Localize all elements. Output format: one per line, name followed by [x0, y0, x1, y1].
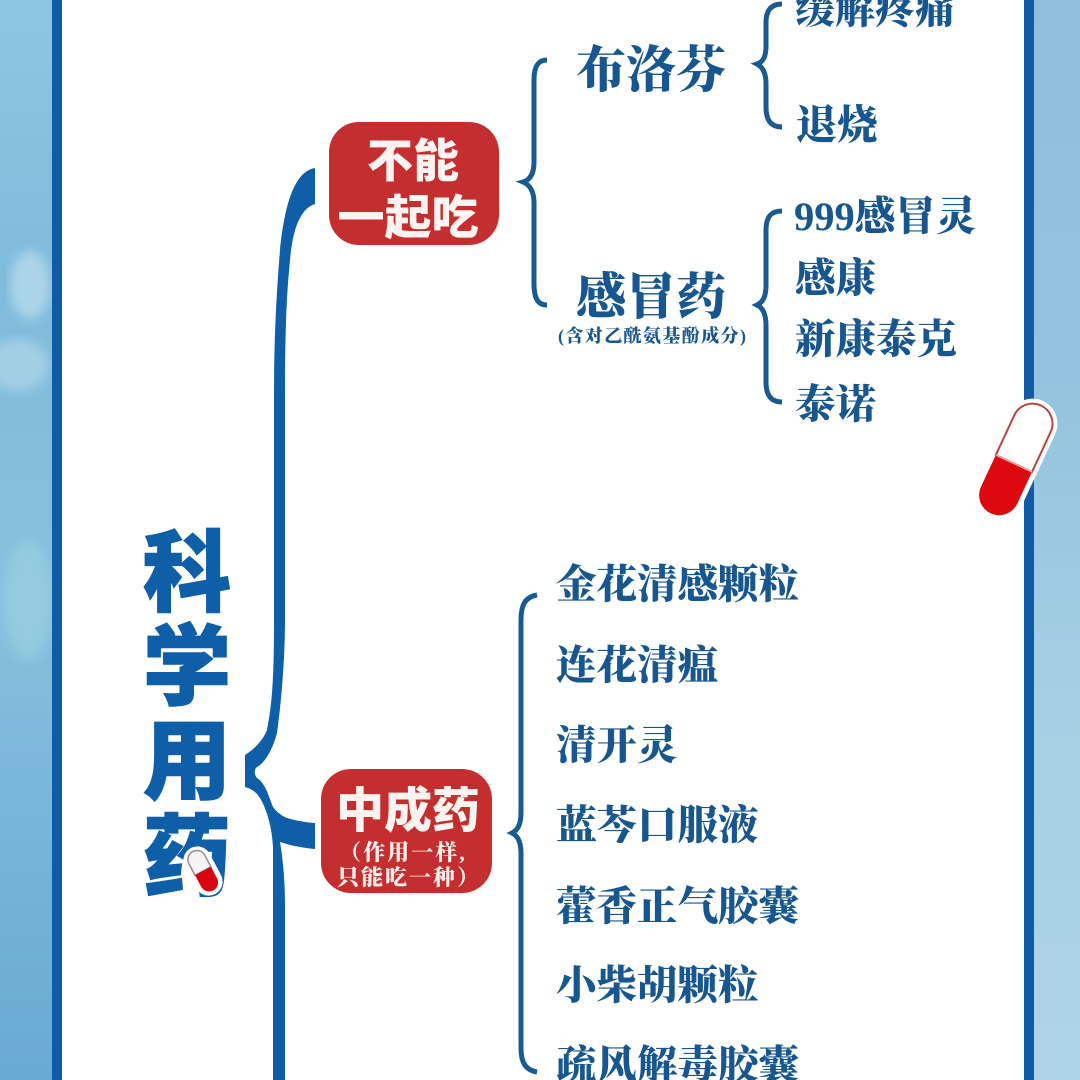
- node: 不能一起吃: [329, 122, 499, 245]
- branch: 布洛芬: 布洛芬: [576, 42, 726, 98]
- title: 科学用药: [143, 524, 231, 907]
- title: 科学用药: 学: [143, 618, 231, 717]
- icon: small capsule on title: [178, 841, 228, 901]
- branch: 感冒药: 感冒药: [576, 269, 726, 325]
- title: 科学用药: 用: [143, 712, 231, 811]
- title: 科学用药: 科: [143, 524, 231, 623]
- item: 999感冒灵: 999感冒灵: [794, 194, 976, 239]
- node: 中成药: 只能吃一种）: [337, 865, 481, 890]
- note: 含对乙酰氨基酚成分: (含对乙酰氨基酚成分): [558, 325, 746, 347]
- brace: 布洛芬 branches: [757, 4, 782, 127]
- item: 退烧: 退烧: [796, 102, 878, 148]
- brace: 中成药 list: [512, 595, 537, 1072]
- item: 蓝芩口服液: 蓝芩口服液: [556, 803, 758, 848]
- node: 不能一起吃: 不能: [367, 135, 459, 187]
- brace: 感冒药 branches: [757, 211, 782, 402]
- brace: 不能一起吃 branches: [523, 60, 547, 305]
- main tree trunk connector: [245, 168, 315, 1080]
- item: 泰诺: 泰诺: [795, 382, 876, 427]
- item: 金花清感颗粒: 金花清感颗粒: [556, 562, 799, 607]
- item: 新康泰克: 新康泰克: [795, 316, 957, 362]
- item: 小柴胡颗粒: 小柴胡颗粒: [556, 963, 758, 1008]
- background: left blue panel: [0, 0, 53, 1080]
- icon: large red and white capsule: [966, 390, 1066, 528]
- node: 中成药: [321, 769, 492, 893]
- node: 中成药: （作用一样,: [339, 840, 467, 865]
- background: right blue panel: [1033, 0, 1080, 1080]
- title: 科学用药: 药: [143, 808, 231, 907]
- node: 中成药: 中成药: [336, 784, 480, 838]
- item: 连花清瘟: 连花清瘟: [556, 643, 718, 688]
- item: 感康: 感康: [795, 255, 876, 301]
- item: 清开灵: 清开灵: [556, 723, 678, 768]
- item: 藿香正气胶囊: 藿香正气胶囊: [556, 884, 799, 929]
- node: 不能一起吃: 一起吃: [338, 191, 478, 244]
